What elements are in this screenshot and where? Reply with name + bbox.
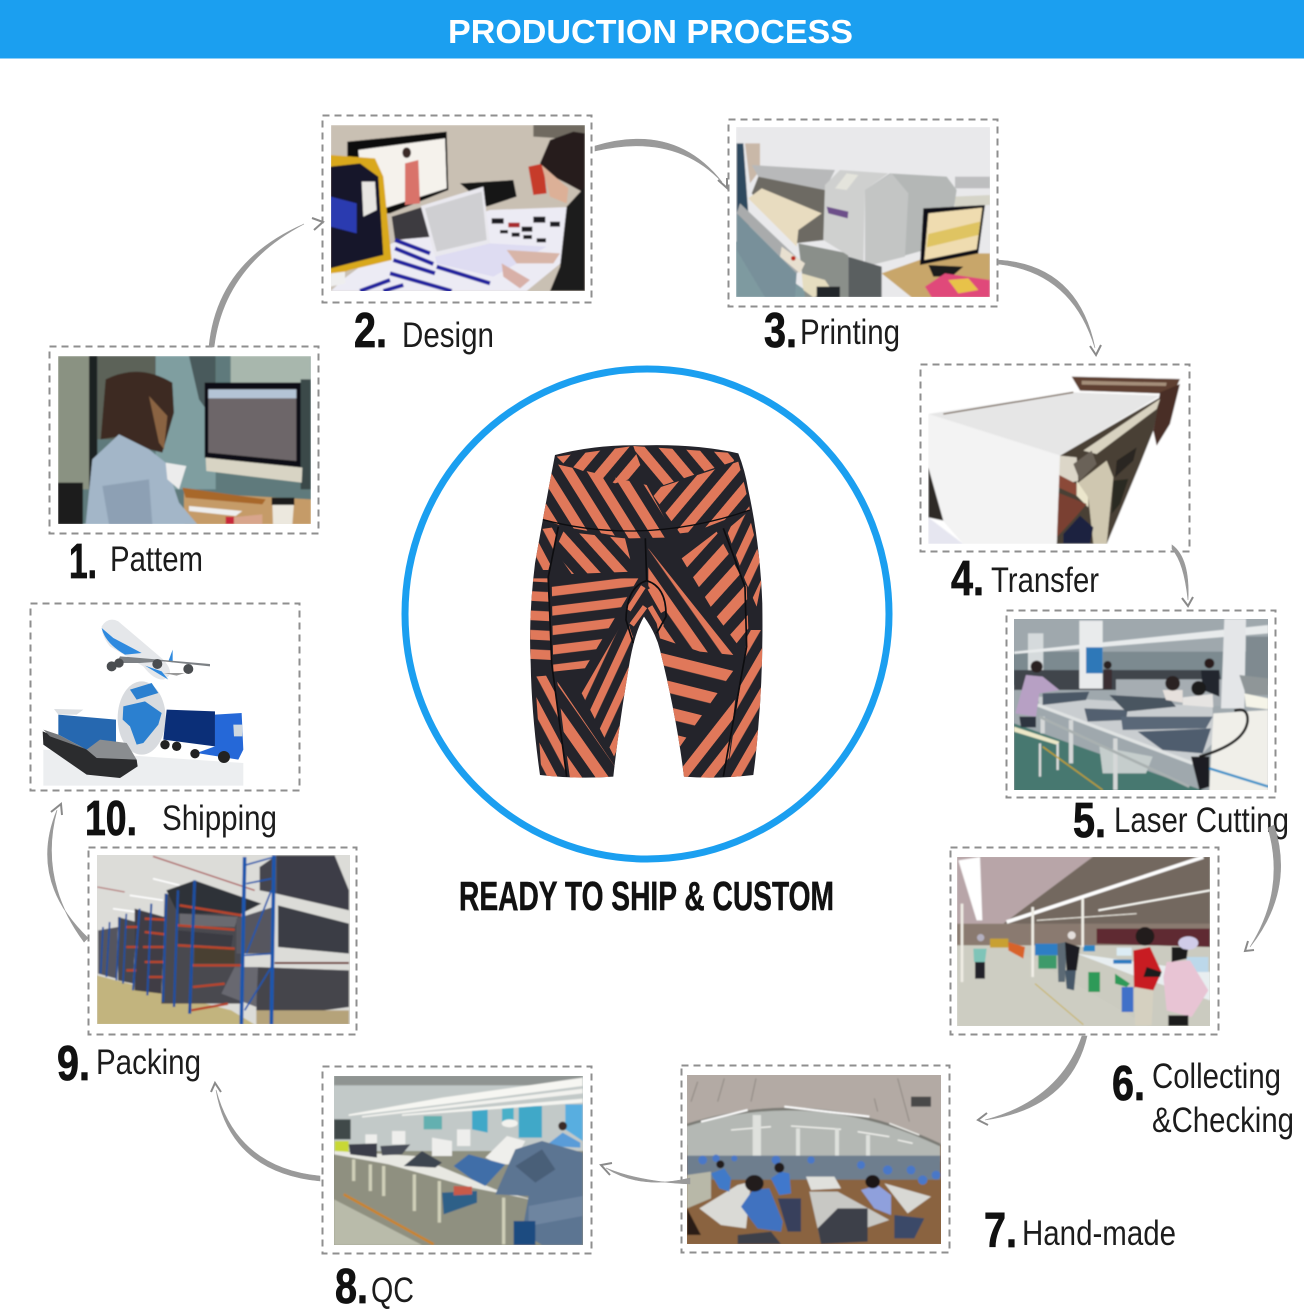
step 1: pattern (50, 346, 318, 534)
icon: reflection floor (43, 750, 243, 786)
label 3: 3. (764, 304, 797, 358)
label 4 (951, 552, 1099, 606)
step 6: collecting & checking (950, 848, 1218, 1034)
label 10: 10. (85, 792, 137, 846)
label 6 (1112, 1057, 1294, 1140)
label 8 (335, 1260, 414, 1314)
arrow 1 to 2 (209, 218, 323, 347)
label 10 (85, 792, 277, 846)
label 9: Packing (96, 1043, 201, 1082)
arrow 2 to 3 (595, 139, 727, 188)
label 1: 1. (69, 535, 97, 589)
label 8: QC (371, 1271, 414, 1310)
label 3 (764, 304, 900, 358)
label 7: 7. (984, 1204, 1017, 1258)
label 2: Design (402, 316, 494, 355)
illustration: transport collage (43, 620, 243, 786)
product: striped shorts (530, 445, 762, 778)
label 1: Pattem (110, 540, 203, 579)
label 2: 2. (354, 304, 387, 358)
caption: ready to ship: READY TO SHIP & CUSTOM (459, 873, 834, 919)
label 2 (354, 304, 494, 358)
photo: collecting floor (957, 857, 1210, 1026)
photo: sewing hall (687, 1075, 941, 1244)
label 8: 8. (335, 1260, 368, 1314)
step 7: hand-made (682, 1066, 950, 1252)
icon: plane (102, 620, 210, 680)
step 4: transfer (920, 364, 1190, 552)
label 4: 4. (951, 552, 984, 606)
icon: truck (160, 710, 243, 763)
step 9: packing (88, 848, 356, 1034)
photo: printing machine (736, 127, 990, 297)
center circle (405, 369, 889, 859)
label 5 (1073, 794, 1289, 848)
label 4: Transfer (991, 561, 1099, 600)
label 6: 6. (1112, 1057, 1145, 1111)
label 5: 5. (1073, 794, 1106, 848)
step 2: design (322, 116, 592, 302)
arrow 8 to 9 (211, 1083, 320, 1181)
photo: warehouse racks (97, 855, 350, 1024)
label 3: Printing (800, 313, 900, 352)
title: PRODUCTION PROCESS (448, 13, 853, 50)
label 9 (57, 1037, 201, 1091)
photo: laser cutting workshop (1014, 619, 1268, 790)
title banner (0, 0, 1304, 58)
photo: quality control tables (334, 1076, 583, 1245)
photo: woman at monitor (58, 356, 311, 524)
arrow 5 to 6 (1245, 825, 1281, 951)
arrow 6 to 7 (978, 1036, 1087, 1125)
arrow 3 to 4 (998, 260, 1101, 355)
label 6: Collecting (1152, 1057, 1281, 1096)
label 9: 9. (57, 1037, 90, 1091)
label 10: Shipping (162, 799, 277, 838)
icon: container ship (43, 709, 138, 778)
label 7 (984, 1204, 1176, 1258)
photo: heat transfer machine (928, 376, 1181, 544)
photo: designer with laptop (331, 125, 585, 291)
step 3: printing (728, 120, 998, 306)
icon: globe (118, 681, 166, 755)
step 5: laser cutting (1006, 610, 1276, 798)
label 7: Hand-made (1022, 1214, 1176, 1253)
label 1 (69, 535, 203, 589)
step 8: qc (322, 1066, 592, 1254)
arrow 4 to 5 (1172, 545, 1193, 606)
arrow 7 to 8 (601, 1163, 690, 1184)
step 10: shipping (30, 604, 300, 790)
arrow 9 to 10 (48, 804, 88, 942)
